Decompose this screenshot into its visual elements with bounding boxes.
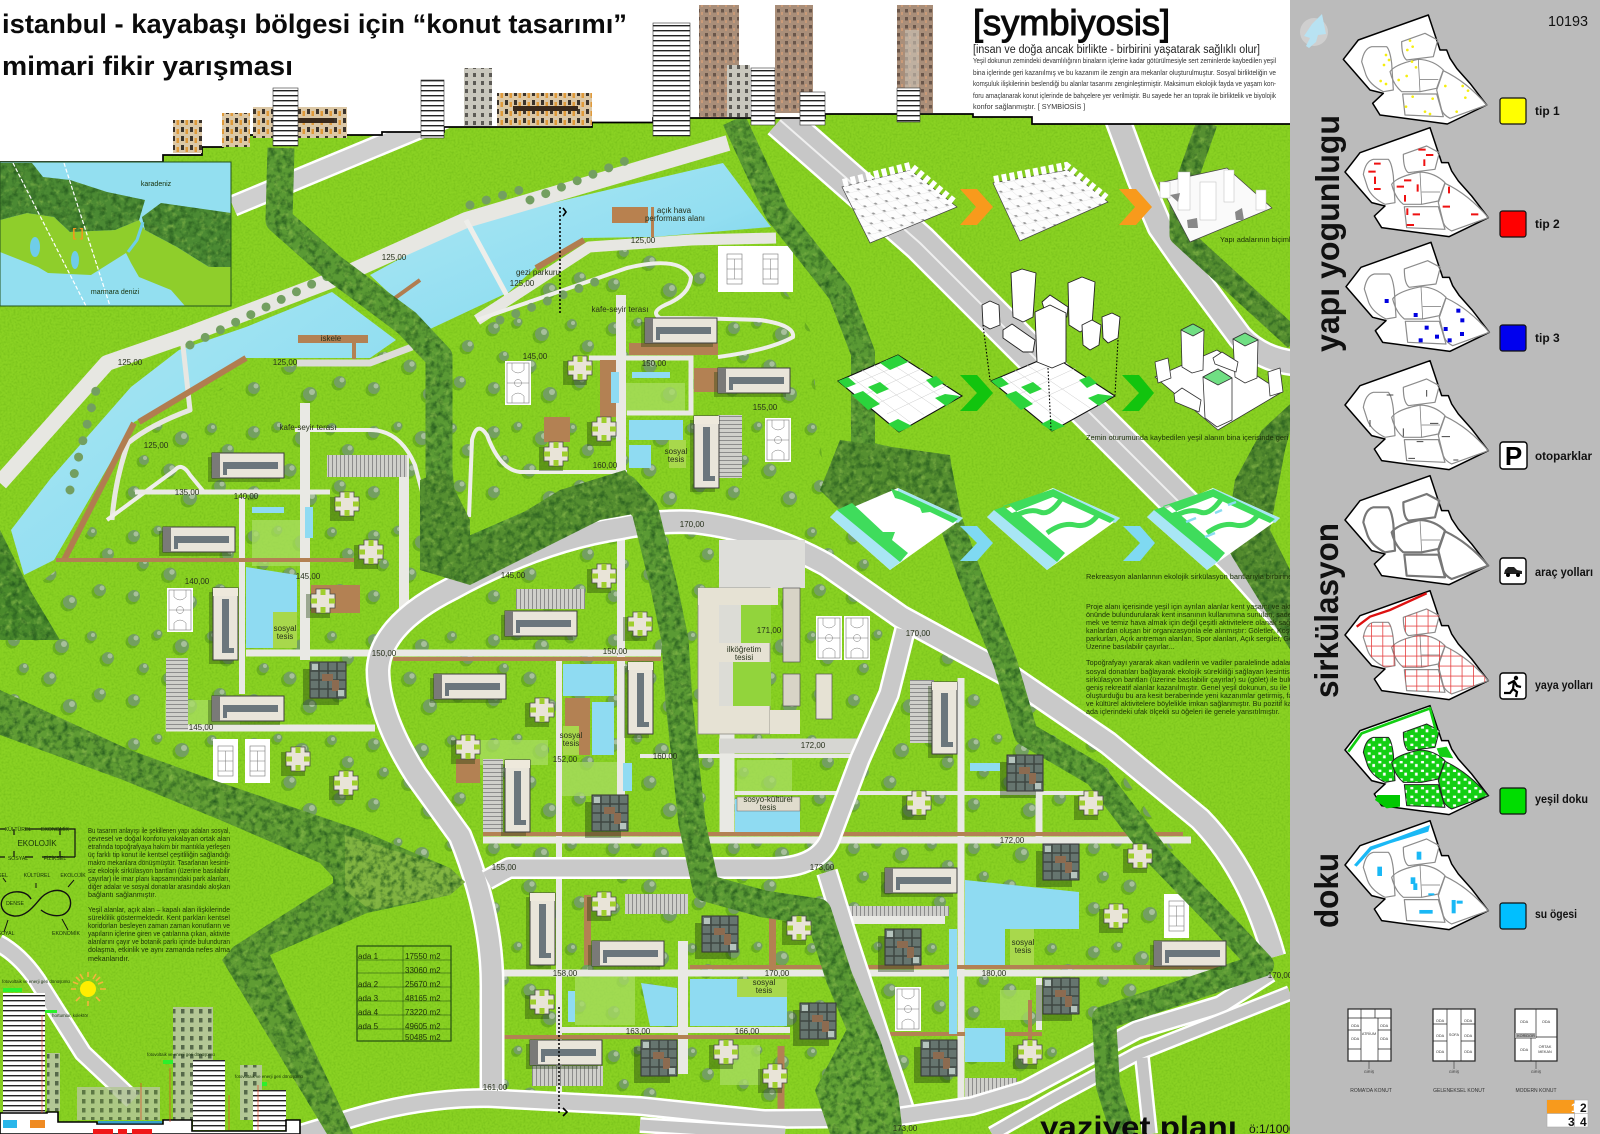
section heading: yapı yogunlugu: yapı yogunlugu [1309,115,1346,352]
floor plan: roma konut: GİRİŞ [1364,1069,1375,1074]
south west text block [88,826,231,963]
south west text block: makro mekanlara dönüşmüştür. Tasarlanan kesinti- [88,858,231,867]
site labels and elevations: 150,00 [372,649,397,658]
map: sea labels: karadeniz [141,181,172,188]
site labels and elevations: 155,00 [753,403,778,412]
concept text block: konfor sağlanmıştır. [ SYMBİOSİS ] [973,102,1085,111]
floor plan: modern konut: KORİDOR [1517,1033,1535,1038]
sport courts [167,246,1189,1031]
site labels and elevations: 155,00 [492,863,517,872]
right text block: sirkülasyon bantları (üzerine basılabilir çayırlar) su (gölet) ile buluşturularak [1086,675,1325,684]
floor plan: roma konut: ODA [1351,1037,1360,1041]
ecology relation diagram: EKOLOJİK [17,839,57,848]
legend: araç yolları: araç yolları [1535,565,1593,579]
sheet index: 1 [1571,1101,1578,1115]
caption: rekreasyon: Rekreasyon alanlarının ekolojik sirkülasyon bantlarıyla birbirine bağlanması [1086,572,1332,581]
orange arrow 1 [960,189,993,225]
floor plan: modern konut: GİRİŞ [1531,1069,1542,1074]
south west text block: Bu tasarım anlayışı ile şekillenen yapı adaları sosyal, [88,826,230,835]
section: service boxes [3,1120,162,1134]
skyline elevation buildings [173,5,933,153]
legend: tip 3 [1500,325,1560,351]
exploded towers [982,269,1120,368]
map: pedestrian paths [1345,591,1488,700]
corridor: eastern blob [820,440,960,530]
ecology relation diagram: SOSYAL [8,856,28,862]
recreation plate A [830,488,963,570]
site labels and elevations [118,206,1293,1133]
site labels and elevations: 150,00 [642,359,667,368]
blue arrow 2 [1123,526,1155,561]
site labels and elevations: 125,00 [631,236,656,245]
right text block [1086,602,1331,716]
top white sky area [0,0,1290,162]
site labels and elevations: tesis [668,455,684,464]
massing block 2 [993,166,1108,241]
massing block 1 [842,166,957,243]
floor plan: roma konut [1348,1009,1392,1094]
site labels and elevations: 145,00 [501,571,526,580]
parking lots [166,415,1017,1098]
site labels and elevations: 170,00 [906,629,931,638]
section heading: doku: doku [1308,853,1345,928]
icon: sun [71,972,106,1006]
site labels and elevations: 173,00 [810,863,835,872]
section: captions: fotovoltaik ve enerji geri dönüşümü [2,979,70,984]
tree-filled site area [0,250,1240,1110]
site labels and elevations: 125,00 [510,279,535,288]
brown towers [699,5,933,117]
south west text block: süreklilik göstermektedir. Kent parkları kentsel [88,913,230,922]
site labels and elevations: 172,00 [1000,836,1025,845]
map: sea labels: marmara denizi [91,289,140,296]
site labels and elevations: tesis [563,739,579,748]
floor plan: roma konut: ATRİUM [1362,1031,1376,1036]
sosyo-kulturel tesis block [737,797,800,811]
waterfront trees [70,155,640,490]
floor plan: geleneksel konut: GELENEKSEL KONUT [1433,1088,1485,1094]
floor plan: roma konut: ODA [1380,1024,1389,1028]
legend: yaya yolları: yaya yolları [1535,678,1593,692]
map: project marker: [ ] [72,226,84,240]
map: vehicle roads [1345,476,1488,585]
floor plan: modern konut: ORTAK [1539,1045,1552,1049]
iskele pier [298,335,368,359]
horizontal apartment slabs [159,318,1226,1069]
plus shaped buildings [281,356,1152,1093]
section heading: sirkülasyon: sirkülasyon [1308,523,1345,698]
open air performance deck [612,207,654,237]
site labels and elevations: performans alanı [645,214,705,223]
floor plan: roma konut: ROMA'DA KONUT [1350,1088,1392,1094]
map: parking [1345,361,1488,470]
legend: araç yolları [1500,558,1593,584]
sheet index: 2 [1580,1101,1587,1115]
south west text block: yapıların içlerine giren ve çatılarına çıkan, aktivite [88,929,230,938]
area table: ada 3 [358,994,379,1003]
floor plan: geleneksel konut: ODA [1436,1034,1445,1038]
recreation band diagram row 3 [830,488,1332,581]
right text block: parkurları, Açık antreman alanları, Spor alanları, Açık sergiler, Gösteriler, [1086,634,1316,643]
floor plan: roma konut: ODA [1380,1037,1389,1041]
title: mimari fikir yarışması [2,51,293,81]
site labels and elevations: 145,00 [296,572,321,581]
site labels and elevations: 163,00 [626,1027,651,1036]
right text block: önünde bulundurularak kent insanının kullanımına sunulan, sadece dinlen- [1086,610,1324,619]
concept text block: foru amaçlanarak konut içlerinde de bahçelere yer verilmiştir. Bu sayede her an toprak ile birliktelik ve biyolojik [973,91,1276,100]
south west text block: etrafında topoğrafyaya hakim bir mantıkla yerleşen [88,842,230,851]
dense infinity diagram [0,872,86,937]
section: captions: fotovoltaik ve enerji geri dönüşümü [147,1052,215,1057]
ponds and water strips [246,372,1079,1062]
floor plan: geleneksel konut: ODA [1464,1050,1473,1054]
site labels and elevations: 170,00 [680,520,705,529]
legend: su ögesi [1500,903,1577,929]
legend: otoparklar [1500,441,1592,471]
site labels and elevations: 158,00 [553,969,578,978]
area table: 73220 m2 [405,1008,441,1017]
ecological corridors [0,120,1300,1134]
vertical apartment slabs [209,416,957,969]
floor plan: geleneksel konut: ODA [1464,1034,1473,1038]
area table: ada 1 [358,952,379,961]
area table: ada 4 [358,1008,379,1017]
blue arrow 1 [960,526,993,561]
site labels and elevations: kafe-seyir terası [592,305,648,314]
concept text block [973,56,1277,111]
area table: 17550 m2 [405,952,441,961]
map: lakes and strait [30,222,143,269]
site labels and elevations: 171,00 [757,626,782,635]
site labels and elevations: 150,00 [603,647,628,656]
dense infinity diagram: KÜLTÜREL [24,872,50,879]
right text block: Üzerine basılabilir çayırlar... [1086,642,1174,651]
section: captions [2,979,303,1079]
map: tip 2 red [1345,128,1488,237]
site labels and elevations: tesis [1015,946,1031,955]
legend: tip 1 [1500,98,1560,124]
corridor: western band [279,148,890,1134]
site labels and elevations: 180,00 [982,969,1007,978]
waterfront wood terraces [64,240,584,560]
south west text block: bağlantı sağlanmıştır. [88,890,156,899]
floor plan: modern konut: MODERN KONUT [1515,1088,1557,1094]
projection dotted lines [983,325,1118,430]
wood strips [56,560,1270,1130]
floor plan: geleneksel konut: ODA [1464,1019,1473,1023]
site labels and elevations: 140,00 [185,577,210,586]
floor plan: modern konut [1515,1009,1557,1094]
river and basins [11,163,771,575]
legend: su ögesi: su ögesi [1535,907,1577,921]
corridor: far left [0,530,60,640]
south west text block: siz ekolojik sirkülasyon bantları (üzerine basılabilir [88,866,231,875]
site labels and elevations: sosyal [665,447,688,456]
south west text block: Yeşil alanlar, açık alan – kapalı alan ilişkilerinde [88,905,230,914]
green ratio diagram row 2 [838,269,1330,442]
area table: ada 5 [358,1022,379,1031]
floor plan: modern konut: ODA [1542,1020,1551,1024]
orange arrow 2 [1119,189,1152,225]
corridor: wetland tip [420,470,655,585]
map: water elements [1345,821,1488,930]
corridor: tree tip [345,835,465,910]
site labels and elevations: 140,00 [234,492,259,501]
competition logo [1300,14,1328,48]
mini site maps [1343,15,1489,930]
right text block: sosyal donatıları bağlayarak ekolojik sürekliliği sağlayan kesintisiz ekolojik [1086,667,1321,676]
section: left tower [3,993,45,1113]
section stripe buildings [273,23,775,146]
site labels and elevations: 172,00 [801,741,826,750]
site labels and elevations: 125,00 [144,441,169,450]
green roofed massing [1155,324,1283,430]
recreation plate B [987,488,1120,570]
site labels and elevations: kafe-seyir terası [280,423,336,432]
section cut line south [559,1007,567,1116]
site labels and elevations: 135,00 [175,488,200,497]
ecology relation diagram: FİZİKSEL [44,855,66,862]
ecology relation diagram: EKONOMİK [41,826,70,833]
sheet index [1547,1100,1588,1129]
area table: ada 2 [358,980,379,989]
map: dashed corridors [13,163,110,306]
legend: yeşil doku [1500,788,1588,814]
roads [0,118,1295,1134]
sheet index: 3 [1568,1115,1575,1129]
area table: 48165 m2 [405,994,441,1003]
map: green tissue [1345,706,1488,815]
site labels and elevations: 152,00 [553,755,578,764]
right gray legend panel [1290,0,1600,1134]
ecology relation diagram: KÜLTÜREL [5,826,31,833]
right text block: Proje alanı içerisinde yeşil için ayrılan alanlar kent yaşamı ve aktiviteleri gözü [1086,602,1331,611]
floor plan: geleneksel konut [1433,1009,1485,1094]
floor plan: roma konut: ODA [1351,1024,1360,1028]
site labels and elevations: sosyo-kültürel [743,795,793,804]
corridor: right edge band [1225,395,1300,665]
floor plan: modern konut: ODA [1520,1020,1529,1024]
right text block: oluşturduğu bu ara kesit beraberinde yeni kazanımlar getirmiş, farklı sportif [1086,691,1324,700]
right text block: ve kültürel aktivitelere böylelikle imkan sağlanmıştır. Bu pozitif kazanım [1086,699,1311,708]
site labels and elevations: 125,00 [382,253,407,262]
map: light land [0,213,231,306]
green arrow 2 [1122,375,1154,411]
floor plan: geleneksel konut: ODA [1436,1050,1445,1054]
green arrow 1 [960,375,993,411]
recreation plate C [1147,488,1280,570]
south west text block: dolaşma, etkinlik ve aynı zamanda nefes alma [88,945,230,954]
site labels and elevations: ilköğretim [727,645,761,654]
site labels and elevations: gezi parkuru [516,268,560,277]
section: stripe towers [193,1060,286,1130]
section: red risers [42,1015,258,1130]
south west text block: mekanlarıdır. [88,954,130,963]
concept text block: bina içlerinde geri kazanılmış ve bu kazanım ile zengin ara mekanlar oluşturulmuştur. Sosyal birlikteliğin ve [973,68,1276,77]
corridor: eastern band [734,120,1262,1134]
location map inset [0,162,231,306]
legend: yeşil doku: yeşil doku [1535,792,1588,806]
site labels and elevations: tesis [756,986,772,995]
primary school complex [698,540,832,734]
site labels and elevations: 173,00 [893,1124,918,1133]
section: captions: fotovoltaik ve enerji geri dönüşümü [235,1074,303,1079]
site labels and elevations: sosyal [753,978,776,987]
floor plan: geleneksel konut: SOFA [1449,1033,1460,1037]
site labels and elevations: iskele [321,334,342,343]
plan title [1040,1111,1296,1134]
right text block: kanlardan oluşan bir organizasyonla ele alınmıştır: Göletler, Koşu [1086,626,1293,635]
site labels and elevations: tesis [760,803,776,812]
pedestrian walkways [135,295,1270,1098]
site labels and elevations: 145,00 [523,352,548,361]
site labels and elevations: tesisi [735,653,753,662]
wood decks [268,343,1050,1002]
area table [357,946,451,1042]
title: istanbul - kayabaşı bölgesi için “konut tasarımı” [2,9,627,39]
concept text block: komşuluk ilişkilerinin beslendiği bu alanlar tasarımı zenginleştirmiştir. Maksimum ekolojik fayda ve yaşam kon- [973,79,1277,88]
section cut line north [560,207,566,315]
caption: zemin oturumu: Zemin oturumunda kaybedilen yeşil alanın bina içerisinde geri kazanılması [1086,433,1330,442]
section: captions: hortumlar, kolektör [52,1013,89,1018]
legend: yaya yolları [1500,673,1593,699]
corridor: lower widening [815,965,895,1134]
map: sea labels [91,181,172,296]
skyline ground line [0,114,1290,162]
area table: 49605 m2 [405,1022,441,1031]
ecology relation diagram [0,826,75,862]
dense infinity diagram: EKONOMİK [52,930,81,937]
map: tip 1 yellow [1343,15,1487,124]
dense infinity diagram: DENSE [6,901,24,907]
floor plan: geleneksel konut: GİRİŞ [1449,1069,1460,1074]
legend: otoparklar: P [1505,441,1522,471]
section: green facades [47,1007,262,1120]
concept heading symbiyosis: [symbiyosis] [973,2,1170,43]
ground plate 2 [991,355,1115,431]
site labels and elevations: 161,00 [483,1083,508,1092]
tower base sections [800,88,920,125]
floor plan: modern konut: MEKAN [1538,1050,1552,1054]
site labels and elevations: 166,00 [735,1027,760,1036]
right text block: mek ve temiz hava almak için değil çeşitli aktivitelere olanak sağlayan me- [1086,618,1322,627]
south west text block: alanlarını çayır ve botanik parkı içinde bulunduran [88,937,230,946]
legend: tip 2 [1500,211,1560,237]
south west text block: çevresel ve doğal konforu yakalayan ortak alan [88,834,230,843]
site labels and elevations: sosyal [560,731,583,740]
concept text block: Yeşil dokunun zemindeki devamlılığının binaların içlerine kadar götürülmesiyle sert zeminlerde kaybedilen yeşil [973,56,1276,65]
entry number: 10193 [1548,13,1588,30]
site labels and elevations: 170,00 [1268,971,1293,980]
corridor: north east band [1180,123,1295,340]
site labels and elevations: sosyal [274,624,297,633]
promenades and waterfront paths [0,143,793,530]
area table: 33060 m2 [405,966,441,975]
sosyal tesis blocks [273,440,1034,997]
dense infinity diagram: EKOLOJİK [60,872,86,879]
title [2,9,627,81]
site labels and elevations: 125,00 [118,358,143,367]
right text block: Topoğrafyayı yararak akan vadilerin ve vadiler paralelinde adaları, parkları, [1086,658,1323,667]
lighter landscaped patches [165,383,1030,1085]
area table: 50485 m2 [405,1033,441,1042]
legend: tip 2: tip 2 [1535,217,1560,231]
massing diagram row 1 [842,166,1306,244]
low rise elevations [173,68,592,153]
site labels and elevations: 170,00 [765,969,790,978]
legend: tip 1: tip 1 [1535,104,1560,118]
floor plan: geleneksel konut: ODA [1436,1019,1445,1023]
site labels and elevations: açık hava [657,206,692,215]
ground plate 1 [838,355,962,432]
south west text block: çayırlar) ile imar planı kapsamındaki park alanları, [88,874,230,883]
map: tip 3 blue [1346,242,1489,351]
map: forest north west [0,163,145,232]
right text block: geniş rekreatif alanlar kazanılmıştır. Genel yeşil dokunun, su ile buluşarak [1086,683,1321,692]
sheet index: 4 [1580,1115,1587,1129]
legend: otoparklar: otoparklar [1535,449,1592,463]
corridor: south west chevron [0,690,465,1134]
floor plan: modern konut: ODA [1520,1048,1529,1052]
grid tower buildings [303,662,1079,1083]
section: underground base [0,1112,300,1134]
right text block: ada içlerindeki ufak ölçekli su öğeleri ile genele yansıtılmıştır. [1086,707,1280,716]
map: forest north east [142,203,231,267]
site labels and elevations: 145,00 [189,723,214,732]
caption: yapı adaları: Yapı adalarının biçimlenişi [1220,235,1306,244]
site labels and elevations: tesis [277,632,293,641]
site labels and elevations: 125,00 [273,358,298,367]
south west section drawing [0,979,303,1134]
south west text block: üç farklı tip konut ile kentsel çeşitliliğin sağlandığı [88,850,230,859]
area table: 25670 m2 [405,980,441,989]
massing block 3 [1159,168,1272,242]
section: green bars [3,988,267,1086]
site labels and elevations: 160,00 [653,752,678,761]
legend: tip 3: tip 3 [1535,331,1560,345]
south west text block: diğer adalar ve sosyal donatılar arasındaki akışkan [88,882,230,891]
concept subtitle: [insan ve doğa ancak birlikte - birbirini yaşatarak sağlıklı olur] [973,44,1260,56]
site labels and elevations: sosyal [1012,938,1035,947]
site labels and elevations: 160,00 [593,461,618,470]
south west text block: koridorları besleyen zaman zaman konutların ve [88,921,230,930]
